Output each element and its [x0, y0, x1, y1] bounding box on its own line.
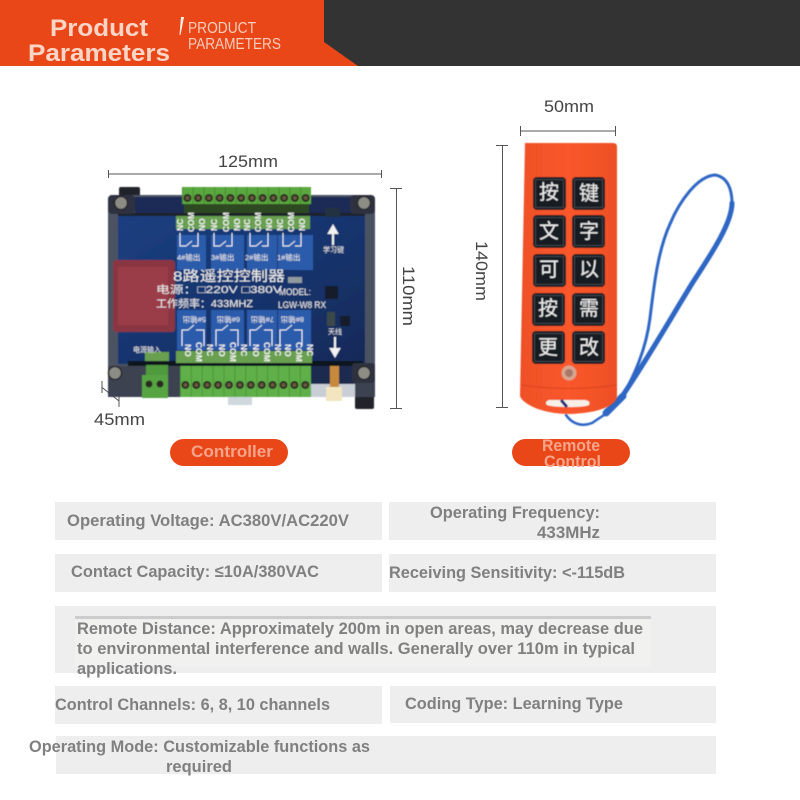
- dimension: controller width: [108, 170, 382, 178]
- controller printed text: MODEL:: [279, 287, 311, 298]
- lower case area: [108, 366, 375, 397]
- key grid: 按: [538, 292, 558, 321]
- param: remote distance: applications.: [77, 659, 177, 678]
- power input label: 电源输入: [133, 345, 161, 354]
- top pin labels: NO: [297, 218, 307, 231]
- bottom pin labels: COM: [262, 342, 272, 362]
- key grid: 可: [539, 253, 559, 282]
- controller case: [108, 195, 375, 397]
- bottom pin labels: COM: [294, 342, 304, 362]
- circuit board: [118, 214, 365, 364]
- controller printed text: 8路遥控控制器: [173, 268, 285, 284]
- top pin labels: NO: [232, 218, 242, 231]
- dimension: remote width: [520, 126, 616, 136]
- header orange tab: [0, 0, 358, 66]
- top pin labels: NO: [197, 218, 207, 231]
- top output labels: 4#输出: [177, 252, 200, 262]
- antenna connector: [326, 366, 342, 401]
- bottom output labels: 6#输出: [217, 315, 240, 325]
- bottom pin labels: NO: [283, 344, 293, 357]
- param: coding type: [390, 686, 716, 723]
- top pin labels: NC: [209, 219, 219, 231]
- bottom pin labels: NC: [205, 344, 215, 356]
- top pin labels: NC: [242, 219, 252, 231]
- key grid: 需: [579, 292, 599, 321]
- title: Parameters: [28, 40, 170, 67]
- controller printed text: LGW-W8 RX: [278, 300, 327, 311]
- param: receiving sensitivity: Receiving Sensitivity: <-115dB: [389, 563, 625, 582]
- title: [28, 15, 170, 67]
- param: remote distance: Remote Distance: Approximately 200m in open areas, may decrease due: [77, 619, 643, 638]
- bottom pin labels: NO: [217, 344, 227, 357]
- param: operating mode: required: [166, 757, 232, 776]
- key grid: 文: [539, 215, 559, 244]
- label: 45mm: 45mm: [94, 410, 145, 429]
- dimension: controller depth: [102, 381, 119, 407]
- param: operating frequency: [389, 502, 716, 542]
- top pin labels: COM: [286, 212, 296, 232]
- param: control channels: [55, 686, 382, 724]
- bottom pin labels: COM: [228, 342, 238, 362]
- pill: Remote Control: Remote: [542, 437, 600, 455]
- dimension: remote height: [496, 146, 508, 408]
- corner screws: [108, 196, 370, 380]
- top pin labels: COM: [253, 212, 263, 232]
- param: coding type: Coding Type: Learning Type: [405, 694, 623, 713]
- remote body: [520, 143, 617, 414]
- key grid: 字: [579, 215, 599, 244]
- top output labels: 2#输出: [245, 252, 268, 262]
- header band: [0, 0, 800, 67]
- top output labels: 1#输出: [277, 252, 300, 262]
- label: 50mm: 50mm: [544, 97, 594, 116]
- subtitle: [188, 20, 281, 53]
- remote control device photo: [520, 143, 617, 414]
- bottom pin labels: NC: [239, 344, 249, 356]
- strap slot: [546, 400, 590, 407]
- controller printed text: 工作频率：433MHZ: [156, 297, 254, 310]
- transformer: [113, 260, 175, 332]
- relay contact symbols: [180, 233, 302, 346]
- bottom pin band: [176, 351, 312, 363]
- relays top row: [177, 235, 313, 270]
- param: operating mode: [29, 736, 716, 776]
- bottom pin labels: [183, 342, 315, 362]
- chips: [288, 277, 350, 326]
- param: operating mode: Operating Mode: Customizable functions as: [29, 737, 370, 756]
- bottom output labels: 7#输出: [251, 315, 274, 325]
- relays bottom row: [177, 310, 311, 350]
- bottom pin labels: NC: [273, 344, 283, 356]
- antenna arrow and label: [328, 327, 342, 356]
- bottom pin labels: NC: [305, 344, 315, 356]
- pill: Controller: [170, 439, 288, 466]
- top dark strip: [135, 197, 355, 213]
- top pin labels: NC: [275, 219, 285, 231]
- label: 125mm: 125mm: [218, 152, 278, 171]
- wrist strap: [566, 175, 732, 425]
- top pin labels: NC: [175, 219, 185, 231]
- bottom output labels: [183, 315, 304, 325]
- param: remote distance: to environmental interference and walls. Generally over 110m in typical: [77, 639, 635, 658]
- param: contact capacity: Contact Capacity: ≤10A/380VAC: [71, 562, 319, 581]
- corner frames: [108, 195, 375, 383]
- param: control channels: Control Channels: 6, 8, 10 channels: [55, 695, 330, 714]
- param: contact capacity: [55, 554, 382, 592]
- param: operating frequency: 433MHz: [537, 523, 600, 542]
- top output labels: [177, 252, 300, 262]
- label: 110mm: 110mm: [399, 266, 418, 326]
- bottom output labels: 8#输出: [281, 315, 304, 325]
- pill: Remote Control: Control: [544, 453, 601, 471]
- key grid: 改: [579, 331, 599, 360]
- key grid: 按: [539, 176, 559, 205]
- key grid: 键: [579, 177, 599, 206]
- pill: Controller: Controller: [191, 443, 274, 461]
- bottom output labels: 5#输出: [183, 315, 206, 325]
- pill: Remote Control: [512, 437, 630, 471]
- mounting ears: [119, 187, 374, 409]
- indicator light: [562, 366, 576, 380]
- title: Product: [50, 15, 148, 42]
- title accent slash: [180, 17, 184, 35]
- param: operating frequency: Operating Frequency:: [430, 503, 600, 522]
- param: operating voltage: Operating Voltage: AC380V/AC220V: [67, 511, 350, 530]
- param: operating voltage: [55, 502, 382, 540]
- controller printed text: 电源：□220V □380V: [156, 283, 282, 296]
- bottom pin labels: NO: [183, 344, 193, 357]
- top output labels: 3#输出: [211, 252, 234, 262]
- top pin labels: COM: [221, 212, 231, 232]
- top pin labels: NO: [264, 218, 274, 231]
- dimension: controller height: [390, 188, 402, 408]
- din clip: [228, 397, 252, 405]
- top pin labels: [175, 212, 307, 232]
- bottom pin labels: COM: [194, 342, 204, 362]
- key grid: 更: [538, 331, 558, 360]
- key grid: [532, 176, 605, 364]
- label: 140mm: 140mm: [472, 241, 491, 301]
- key grid: 以: [579, 253, 599, 282]
- subtitle: PARAMETERS: [188, 36, 281, 53]
- power terminal: [142, 352, 169, 398]
- subtitle: PRODUCT: [188, 20, 256, 37]
- learn key arrow and label: 学习键: [323, 245, 344, 254]
- controller printed text: [156, 268, 327, 311]
- param: receiving sensitivity: [389, 554, 716, 592]
- bottom terminal block: [180, 366, 311, 397]
- param: remote distance: [55, 606, 716, 678]
- controller device photo: [108, 187, 375, 409]
- top terminal block: [176, 187, 311, 229]
- antenna arrow and label: 天线: [328, 327, 342, 336]
- top pin labels: COM: [186, 212, 196, 232]
- learn key arrow and label: [323, 208, 344, 254]
- bottom pin labels: NO: [251, 344, 261, 357]
